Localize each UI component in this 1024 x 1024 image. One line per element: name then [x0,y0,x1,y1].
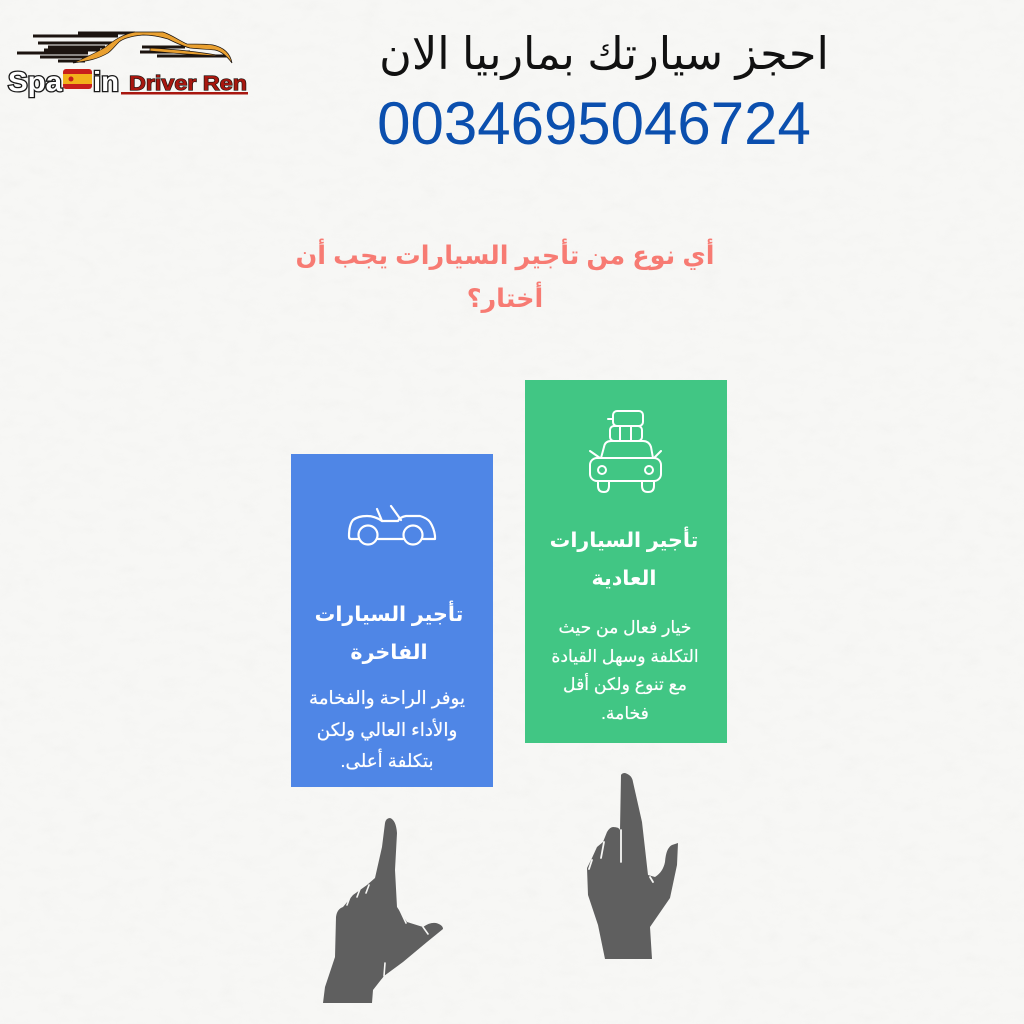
description: regular car rental: مع تنوع ولكن أقل [563,674,687,694]
heading: regular car rental: تأجير السيارات [550,529,698,552]
description: luxury car rental: والأداء العالي ولكن [317,718,457,740]
phone number: 0034695046724 [377,90,811,157]
logo wordmark Driver Ren: Driver Ren [129,73,247,95]
description: regular car rental: فخامة. [601,703,649,723]
heading: luxury car rental: الفاخرة [350,641,428,664]
logo flag [63,69,92,89]
logo wordmark in: in [93,66,119,97]
heading: regular car rental [550,526,698,590]
description: regular car rental [551,617,699,723]
logo wordmark Spa: Spa [8,66,62,97]
icon: convertible car [348,504,436,546]
heading: regular car rental: العادية [592,567,656,590]
panel: regular car rental [525,380,727,743]
question heading: أي نوع من تأجير السيارات يجب أن [296,242,714,270]
heading: luxury car rental [315,600,463,664]
logo car silhouette [73,32,232,63]
description: regular car rental: التكلفة وسهل القيادة [551,646,699,666]
panel: luxury car rental [291,454,493,787]
question heading: أختار؟ [467,284,543,312]
description: luxury car rental [309,687,465,771]
description: luxury car rental: بتكلفة أعلى. [340,750,434,771]
description: regular car rental: خيار فعال من حيث [559,617,691,637]
icon: car with luggage [589,410,662,493]
logo speed lines [17,33,228,61]
logo underline [121,92,248,94]
question heading [296,238,714,313]
logo: Spain Driver Rent [7,32,248,98]
heading: luxury car rental: تأجير السيارات [315,603,463,626]
description: luxury car rental: يوفر الراحة والفخامة [309,687,465,708]
booking title: احجز سيارتك بماربيا الان [379,30,829,79]
